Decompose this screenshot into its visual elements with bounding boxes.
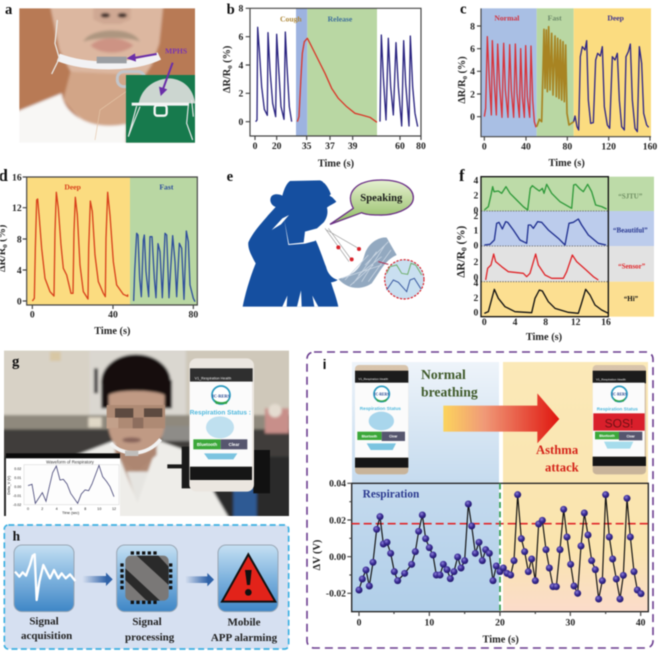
panel b: cough and release chart: Cough xyxy=(280,14,302,23)
panel d: deep and fast chart: 0 xyxy=(30,310,35,321)
panel f: spoken words chart: 2 xyxy=(474,257,479,268)
panel c: normal fast deep chart: 6 xyxy=(470,44,475,55)
panel f: spoken words chart: 2 xyxy=(474,293,479,304)
phone: V1_Respiration Health xyxy=(195,376,231,380)
phone SOS: Respiration Status xyxy=(597,406,638,411)
panel d: deep and fast chart xyxy=(0,166,198,337)
panel i: respiration scatter chart: -0.02 xyxy=(326,589,346,600)
panel f: spoken words chart: 4 xyxy=(474,176,479,187)
icon: warning tile xyxy=(218,545,278,612)
panel i: respiration scatter chart: 0.04 xyxy=(329,479,346,490)
text: normal breathing: breathing xyxy=(421,385,478,400)
inset waveform chart: Waveform of Respiratory xyxy=(46,460,95,465)
phone SOS: IC-RERS xyxy=(612,392,627,396)
panel f: spoken words chart: “SJTU” xyxy=(618,192,643,200)
panel i: respiration scatter chart: 0.00 xyxy=(329,552,346,563)
panel g: person with phone photo xyxy=(0,347,293,520)
panel c: normal fast deep chart: 0 xyxy=(462,75,469,79)
arrows xyxy=(132,54,157,58)
panel i: background regions xyxy=(352,362,648,612)
inset waveform chart: 0.02 xyxy=(14,467,21,471)
panel b: cough and release chart: 0 xyxy=(227,65,234,69)
label: mobile app alarming: Mobile xyxy=(228,617,260,629)
panel i: respiration scatter chart: ΔV (V) xyxy=(312,540,323,570)
arrow 2 xyxy=(185,573,214,586)
panel e: speaking illustration: Speaking xyxy=(360,193,403,204)
panel f: spoken words chart: 1 xyxy=(474,226,479,237)
data points xyxy=(355,491,644,602)
inset waveform chart: -0.02 xyxy=(13,503,21,507)
panel b: cough and release chart: 35 xyxy=(302,141,312,152)
panel a: mask photo xyxy=(5,2,198,147)
phone holder xyxy=(166,446,191,490)
panel i: respiration scatter chart: 30 xyxy=(566,618,575,629)
panel i: respiration scatter chart xyxy=(312,479,648,646)
inset waveform chart: 0 xyxy=(27,507,29,511)
panel i: respiration scatter chart: 0.02 xyxy=(329,515,346,526)
inset waveform chart: -0.01 xyxy=(13,494,21,498)
panel c: normal fast deep chart: 0 xyxy=(470,112,475,123)
panel f: spoken words chart: 0 xyxy=(474,273,479,284)
panel f: spoken words chart: 12 xyxy=(571,317,581,328)
panel c: normal fast deep chart: 160 xyxy=(643,142,657,153)
panel b: cough and release chart: (%) xyxy=(222,46,233,65)
inset waveform chart: 0.00 xyxy=(14,485,21,489)
panel f: spoken words chart: “Hi” xyxy=(624,295,639,303)
panel i: respiration scatter chart: Respiration xyxy=(363,489,420,501)
panel d: deep and fast chart: Time (s) xyxy=(94,326,130,337)
panel b: cough and release chart: 37 xyxy=(325,141,335,152)
text: asthma attack: Asthma xyxy=(536,443,578,457)
panel b: cough and release chart: ΔR/R xyxy=(222,69,233,93)
panel b: cough and release chart xyxy=(222,2,426,170)
panel c: normal fast deep chart: Deep xyxy=(607,14,624,23)
label: mobile app alarming: APP alarming xyxy=(211,632,278,644)
panel b: cough and release chart: 60 xyxy=(395,141,405,152)
panel b: cough and release chart: 8 xyxy=(239,4,244,15)
fibre sensor mat xyxy=(338,238,397,288)
panel i: dashed frame xyxy=(307,352,653,648)
inset waveform chart: 4 xyxy=(56,507,58,511)
panel b: cough and release chart: Release xyxy=(328,14,353,23)
mask on chin xyxy=(111,439,161,453)
panel i: phones and arrow xyxy=(323,356,646,474)
phone xyxy=(189,358,254,492)
magnified signal circle xyxy=(385,260,424,299)
panel c: normal fast deep chart: c xyxy=(460,1,467,17)
panel c: normal fast deep chart: 2 xyxy=(470,89,475,100)
panel d: deep and fast chart: 40 xyxy=(108,310,118,321)
panel a: mask photo: MPHS xyxy=(165,46,187,55)
inset waveform chart: 10 xyxy=(97,507,101,511)
phone normal: Clear xyxy=(389,435,398,439)
panel d: deep and fast chart: 0 xyxy=(17,296,22,307)
panel b: cough and release chart: 6 xyxy=(239,32,244,43)
inset waveform chart: 0.01 xyxy=(14,476,21,480)
icon: chip tile xyxy=(117,545,177,612)
phone normal: Bluetooth xyxy=(362,434,377,438)
head xyxy=(114,445,158,459)
panel f: spoken words chart: 8 xyxy=(543,317,548,328)
phone SOS xyxy=(593,365,646,474)
phone SOS: SOS! xyxy=(605,416,633,430)
panel d: deep and fast chart: 16 xyxy=(12,172,22,183)
panel b: cough and release chart: 20 xyxy=(272,141,282,152)
panel c: normal fast deep chart: 8 xyxy=(470,21,475,32)
panel c: normal fast deep chart: Time (s) xyxy=(549,158,585,169)
panel f: spoken words chart: 4 xyxy=(513,317,518,328)
panel f: spoken words chart: f xyxy=(459,166,465,185)
phone SOS: V1_Respiration Health xyxy=(596,378,626,382)
inset waveform chart: 6 xyxy=(70,507,72,511)
panel d: deep and fast chart: 80 xyxy=(189,310,198,321)
phone: Bluetooth xyxy=(197,442,217,447)
panel c: normal fast deep chart: 4 xyxy=(470,67,475,78)
panel i: phones and arrow: i xyxy=(323,356,327,372)
inset waveform chart: Time (sec) xyxy=(62,511,79,515)
panel a: mask photo: a xyxy=(5,2,13,18)
inset waveform chart: 2 xyxy=(41,507,43,511)
inset waveform chart: 8 xyxy=(84,507,86,511)
panel f: spoken words chart: (%) xyxy=(455,225,467,247)
blurred eye mosaic xyxy=(107,405,165,428)
panel b: cough and release chart: Time (s) xyxy=(318,159,354,170)
panel f: spoken words chart: Time (s) xyxy=(526,332,562,343)
phone normal: IC-RERS xyxy=(374,392,389,396)
panel b: cough and release chart: 39 xyxy=(348,141,358,152)
label: signal acquisition: Signal xyxy=(29,615,59,627)
phone normal: Respiration Status xyxy=(360,406,401,411)
phone normal xyxy=(355,365,408,474)
panel f: spoken words chart: 0 xyxy=(459,247,468,251)
panel f: spoken words chart: 0 xyxy=(474,205,479,216)
panel d: deep and fast chart: Fast xyxy=(159,183,174,192)
panel b: cough and release chart: b xyxy=(227,2,235,18)
big arrow xyxy=(443,393,559,443)
panel d: deep and fast chart: 12 xyxy=(12,203,22,214)
panel d: deep and fast chart: 0 xyxy=(2,244,9,248)
inset mask photo xyxy=(126,75,195,143)
icon: signal tile xyxy=(14,545,75,612)
phone SOS: Clear xyxy=(626,434,636,438)
panel e: speaking illustration xyxy=(227,169,424,307)
panel h: signal workflow xyxy=(4,525,289,649)
panel f: spoken words chart: ΔR/R xyxy=(455,251,467,278)
panel f: spoken words chart: 0 xyxy=(482,317,487,328)
panel b: cough and release chart: 0 xyxy=(239,117,244,128)
panel f: spoken words chart: “Sensor” xyxy=(618,262,646,270)
panel c: normal fast deep chart: 0 xyxy=(482,142,487,153)
panel f: spoken words chart xyxy=(455,166,654,343)
phone normal: V1_Respiration Health xyxy=(358,377,389,381)
panel h: signal workflow: h xyxy=(13,529,21,544)
panel c: normal fast deep chart: Normal xyxy=(494,14,519,23)
panel b: cough and release chart: 0 xyxy=(253,141,258,152)
label: signal processing: Signal xyxy=(132,616,162,628)
panel f: spoken words chart: 2 xyxy=(474,211,479,222)
panel d: deep and fast chart: 4 xyxy=(17,265,22,276)
panel c: normal fast deep chart: Fast xyxy=(548,14,562,23)
phone SOS: Bluetooth xyxy=(599,434,615,438)
panel b: cough and release chart: 80 xyxy=(416,141,426,152)
panel c: normal fast deep chart: 120 xyxy=(601,142,616,153)
panel d: deep and fast chart: Deep xyxy=(64,183,81,192)
panel d: deep and fast chart: 8 xyxy=(17,234,22,245)
breath molecules xyxy=(325,228,358,262)
speech bubble xyxy=(330,180,413,224)
inset waveform chart xyxy=(6,453,120,517)
panel i: respiration scatter chart: Time (s) xyxy=(483,635,519,646)
label: signal processing: processing xyxy=(125,631,175,643)
panel f: spoken words chart: 0 xyxy=(474,308,479,319)
panel c: normal fast deep chart: 80 xyxy=(563,142,572,153)
phone: Clear xyxy=(229,442,240,447)
panel i: respiration scatter chart: 10 xyxy=(425,618,434,629)
panel b: cough and release chart: 2 xyxy=(239,89,244,100)
text: asthma attack: attack xyxy=(545,460,580,474)
phone: Respiration Status : xyxy=(190,409,251,416)
inset waveform chart: Delta_V (V) xyxy=(7,476,11,495)
panel i: respiration scatter chart: 0 xyxy=(357,618,362,629)
phone: IC-RERS xyxy=(212,393,230,398)
lab coat xyxy=(67,440,230,520)
panel i: respiration scatter chart: 20 xyxy=(495,618,505,629)
panel c: normal fast deep chart: (%) xyxy=(457,56,468,76)
label: signal acquisition: acquisition xyxy=(21,630,72,642)
panel c: normal fast deep chart: ΔR/R xyxy=(457,79,468,104)
panel f: spoken words chart: “Beautiful” xyxy=(613,227,648,235)
arrow 1 xyxy=(83,573,113,586)
panel c: normal fast deep chart xyxy=(457,1,657,169)
panel e: speaking illustration: e xyxy=(227,169,234,185)
panel f: spoken words chart: 2 xyxy=(474,190,479,201)
inset waveform chart: 12 xyxy=(112,507,116,511)
silhouette xyxy=(243,180,338,307)
panel i: respiration scatter chart: 40 xyxy=(636,618,646,629)
panel c: normal fast deep chart: 40 xyxy=(521,142,531,153)
panel g: person with phone photo: g xyxy=(12,354,20,370)
mask band xyxy=(58,56,159,65)
text: normal breathing: Normal xyxy=(421,367,466,382)
panel f: spoken words chart: 4 xyxy=(474,278,479,289)
panel f: spoken words chart: 0 xyxy=(474,240,479,251)
panel f: spoken words chart: 16 xyxy=(601,317,611,328)
panel b: cough and release chart: 4 xyxy=(239,60,244,71)
